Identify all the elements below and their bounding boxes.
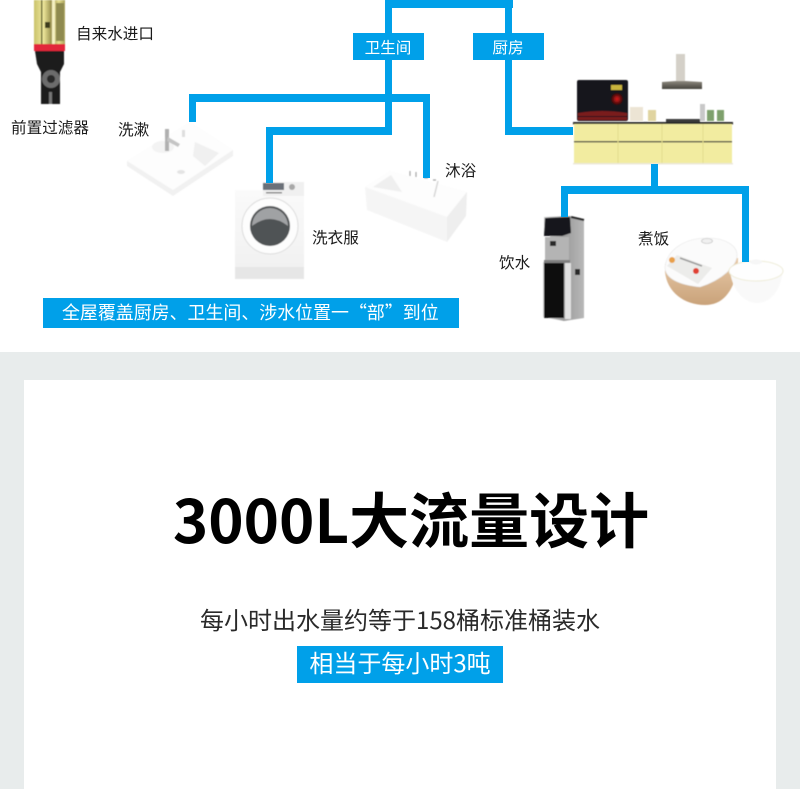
icon: water dispenser bbox=[543, 216, 584, 321]
banner: whole house coverage: 全屋覆盖厨房、卫生间、涉水位置一“部”到位 bbox=[62, 299, 439, 325]
callout: three tons per hour: 相当于每小时3吨 bbox=[309, 644, 491, 679]
panel: flow rate card bbox=[24, 380, 776, 789]
tag: bathroom: 卫生间 bbox=[365, 39, 411, 57]
label: cooking rice: 煮饭 bbox=[638, 230, 670, 248]
icon: rice cooker bbox=[665, 238, 738, 305]
panel: whole house water diagram bbox=[0, 0, 800, 352]
label: washing up: 洗漱 bbox=[118, 121, 150, 139]
icon: white bowl bbox=[729, 260, 783, 303]
text: description: 每小时出水量约等于158桶标准桶装水 bbox=[200, 601, 600, 636]
label: pre-filter: 前置过滤器 bbox=[11, 119, 89, 137]
label: tap water inlet: 自来水进口 bbox=[76, 25, 154, 43]
tag: kitchen bbox=[473, 33, 544, 60]
tag: bathroom bbox=[353, 33, 424, 60]
label: bathing: 沐浴 bbox=[445, 162, 477, 180]
tag: kitchen: 厨房 bbox=[492, 39, 524, 57]
icon: pre-filter bbox=[34, 0, 65, 104]
water pipes bbox=[189, 0, 749, 262]
heading: 3000L大流量设计 bbox=[173, 474, 649, 561]
icon: kitchen cabinet with purifier bbox=[573, 54, 733, 164]
label: laundry: 洗衣服 bbox=[312, 229, 359, 247]
icon: washing machine bbox=[235, 182, 304, 279]
icon: bathtub bbox=[365, 171, 467, 242]
label: drinking water: 饮水 bbox=[499, 254, 531, 272]
icon: wash basin bbox=[127, 122, 233, 196]
